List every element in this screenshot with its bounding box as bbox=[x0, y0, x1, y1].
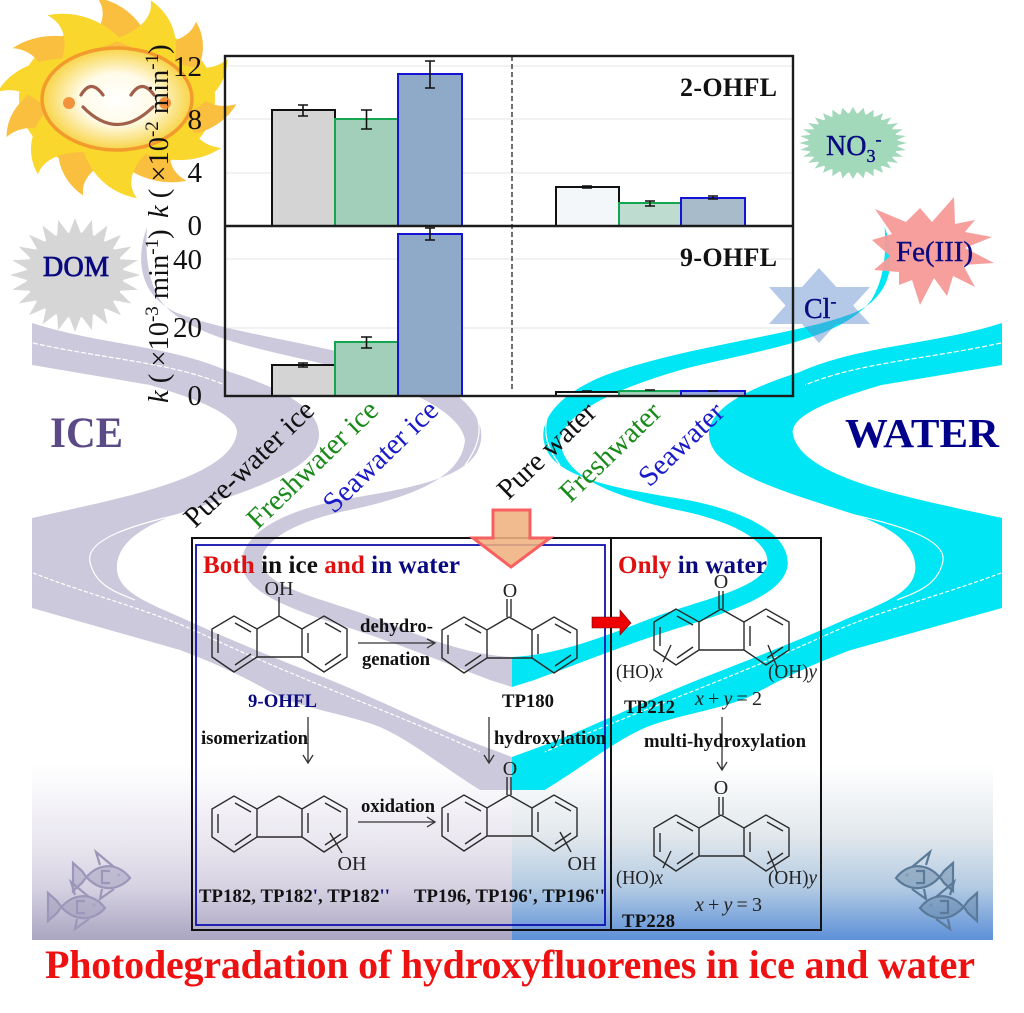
arrow: hydroxylation: hydroxylation bbox=[494, 728, 607, 749]
icon: Fe(III) star bbox=[872, 197, 994, 305]
icon: NO3- burst: 3 bbox=[866, 146, 875, 166]
panel: only in water bbox=[611, 538, 817, 932]
molecule: TP180 bbox=[442, 580, 577, 712]
ice ribbons bbox=[32, 227, 512, 790]
arrow: dehydrogenation: genation bbox=[362, 649, 431, 670]
bottom panel bars: 9-OHFL bbox=[272, 234, 745, 396]
heading: only in water: Only in water bbox=[618, 552, 767, 579]
molecule: TP180: O bbox=[503, 580, 517, 602]
molecule: 9-OHFL: OH bbox=[265, 578, 293, 600]
x axis labels: Pure water bbox=[491, 396, 603, 506]
molecule: TP180: TP180 bbox=[502, 691, 554, 712]
icon: Cl- star bbox=[769, 268, 870, 343]
x axis labels: Pure-water ice bbox=[178, 394, 321, 534]
icon: NO3- burst bbox=[795, 104, 911, 182]
panel label: 2-OHFL: 2-OHFL bbox=[680, 73, 777, 102]
axis ticks: 0 bbox=[188, 380, 202, 412]
icon: Fe(III) star: Fe(III) bbox=[896, 236, 973, 268]
molecule: TP182: OH bbox=[338, 853, 366, 875]
panel: pathway outer box bbox=[192, 538, 821, 930]
y axis label: 9-OHFL: ) bbox=[144, 229, 175, 239]
molecule: TP228: TP228 bbox=[622, 911, 675, 932]
y axis label: 9-OHFL: k ( ×10 bbox=[144, 322, 175, 403]
heading: both in ice and in water: Both in ice and in water bbox=[203, 552, 460, 579]
x axis labels: Seawater bbox=[632, 396, 731, 493]
arrow: isomerization: isomerization bbox=[201, 728, 309, 749]
molecule: TP212: O bbox=[714, 571, 728, 593]
icon: Cl- star: Cl bbox=[804, 294, 830, 325]
molecule: TP228: O bbox=[714, 777, 728, 799]
molecule: TP228: (OH)y bbox=[768, 867, 817, 889]
molecule: TP228 bbox=[616, 777, 817, 932]
panel label: 9-OHFL: 9-OHFL bbox=[680, 243, 777, 272]
molecule: TP212: x + y = 2 bbox=[694, 688, 762, 710]
icon: DOM burst bbox=[7, 215, 143, 335]
title: Photodegradation of hydroxyfluorenes in ice and water bbox=[45, 942, 975, 987]
molecule: TP196: OH bbox=[568, 853, 596, 875]
arrow: block down arrow bbox=[473, 510, 550, 567]
icon: NO3- burst: - bbox=[875, 129, 881, 149]
chart frame bbox=[225, 56, 793, 396]
background: water gradient bbox=[512, 765, 993, 940]
molecule: 9-OHFL bbox=[212, 578, 347, 712]
molecule: TP212: TP212 bbox=[624, 697, 675, 718]
molecule: TP212 bbox=[616, 571, 817, 718]
arrow: multi-hydroxylation bbox=[644, 717, 807, 770]
panel: both in ice and in water bbox=[196, 545, 607, 925]
arrow: dehydrogenation bbox=[358, 616, 435, 670]
axis ticks: 12 bbox=[173, 51, 202, 83]
molecule: TP228: (HO)x bbox=[616, 867, 663, 889]
y axis label: 9-OHFL: -1 bbox=[142, 239, 163, 255]
bar chart: rate constants bbox=[142, 44, 793, 535]
arrow: oxidation bbox=[358, 796, 436, 827]
molecule: TP196 bbox=[414, 758, 605, 907]
molecule: TP196: O bbox=[503, 758, 517, 780]
water ribbons bbox=[512, 227, 1002, 790]
label: WATER: WATER bbox=[845, 410, 999, 456]
label: ICE: ICE bbox=[50, 410, 123, 457]
axis ticks bbox=[173, 51, 202, 412]
y axis label: 2-OHFL: -2 bbox=[142, 121, 163, 137]
background: ice gradient bbox=[32, 765, 512, 940]
x axis labels bbox=[178, 394, 731, 535]
icon: smiling sun bbox=[0, 0, 240, 201]
axis ticks: 20 bbox=[173, 312, 202, 344]
icon: fish ice side bbox=[48, 852, 130, 929]
molecule: 9-OHFL: 9-OHFL bbox=[248, 691, 317, 712]
arrow: multi-hydroxylation: multi-hydroxylation bbox=[644, 731, 807, 752]
y axis label: 2-OHFL: min bbox=[144, 70, 175, 121]
axis ticks: 8 bbox=[188, 104, 202, 136]
x axis labels: Freshwater bbox=[553, 396, 668, 509]
arrow: dehydrogenation: dehydro- bbox=[360, 616, 433, 637]
molecule: TP228: x + y = 3 bbox=[694, 894, 762, 916]
molecule: TP196: TP196, TP196', TP196'' bbox=[414, 886, 605, 907]
axis ticks: 40 bbox=[173, 244, 202, 276]
icon: fish water side bbox=[896, 852, 977, 929]
arrow: red right arrow bbox=[592, 610, 631, 635]
molecule: TP182 bbox=[199, 796, 390, 907]
arrow: oxidation: oxidation bbox=[361, 796, 436, 817]
top panel bars: 2-OHFL bbox=[272, 74, 745, 226]
icon: DOM burst: DOM bbox=[43, 252, 109, 283]
y axis label: 2-OHFL: ) bbox=[144, 44, 175, 54]
molecule: TP212: (OH)y bbox=[768, 661, 817, 683]
y axis label: 9-OHFL: min bbox=[144, 255, 175, 306]
arrow: isomerization bbox=[201, 717, 313, 763]
axis ticks: 0 bbox=[188, 210, 202, 242]
icon: NO3- burst: NO bbox=[826, 131, 866, 162]
molecule: TP182: TP182, TP182', TP182'' bbox=[199, 886, 390, 907]
error bars bbox=[298, 61, 718, 391]
x axis labels: Freshwater ice bbox=[240, 394, 385, 535]
axis ticks: 4 bbox=[188, 157, 202, 189]
y axis label: 2-OHFL: k ( ×10 bbox=[144, 137, 175, 218]
y axis label: 9-OHFL: -3 bbox=[142, 306, 163, 322]
arrow: hydroxylation bbox=[484, 717, 607, 763]
x axis labels: Seawater ice bbox=[317, 394, 445, 519]
y axis label: 2-OHFL: -1 bbox=[142, 54, 163, 70]
molecule: TP212: (HO)x bbox=[616, 661, 663, 683]
icon: Cl- star: - bbox=[830, 291, 836, 311]
